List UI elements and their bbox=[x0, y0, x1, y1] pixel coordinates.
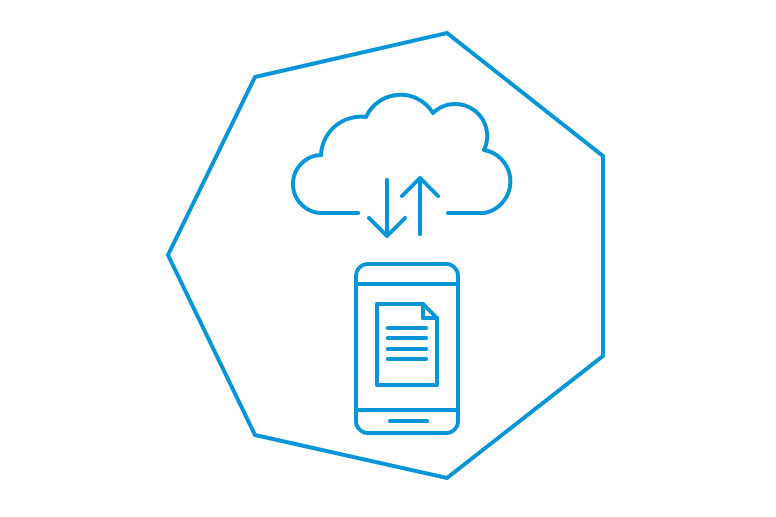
icon: document bbox=[377, 304, 437, 385]
arrow: up bbox=[402, 178, 438, 234]
icon: phone bbox=[356, 264, 458, 433]
icon: cloud bbox=[293, 95, 510, 213]
heptagon frame bbox=[168, 33, 603, 478]
arrow: down bbox=[369, 180, 405, 236]
